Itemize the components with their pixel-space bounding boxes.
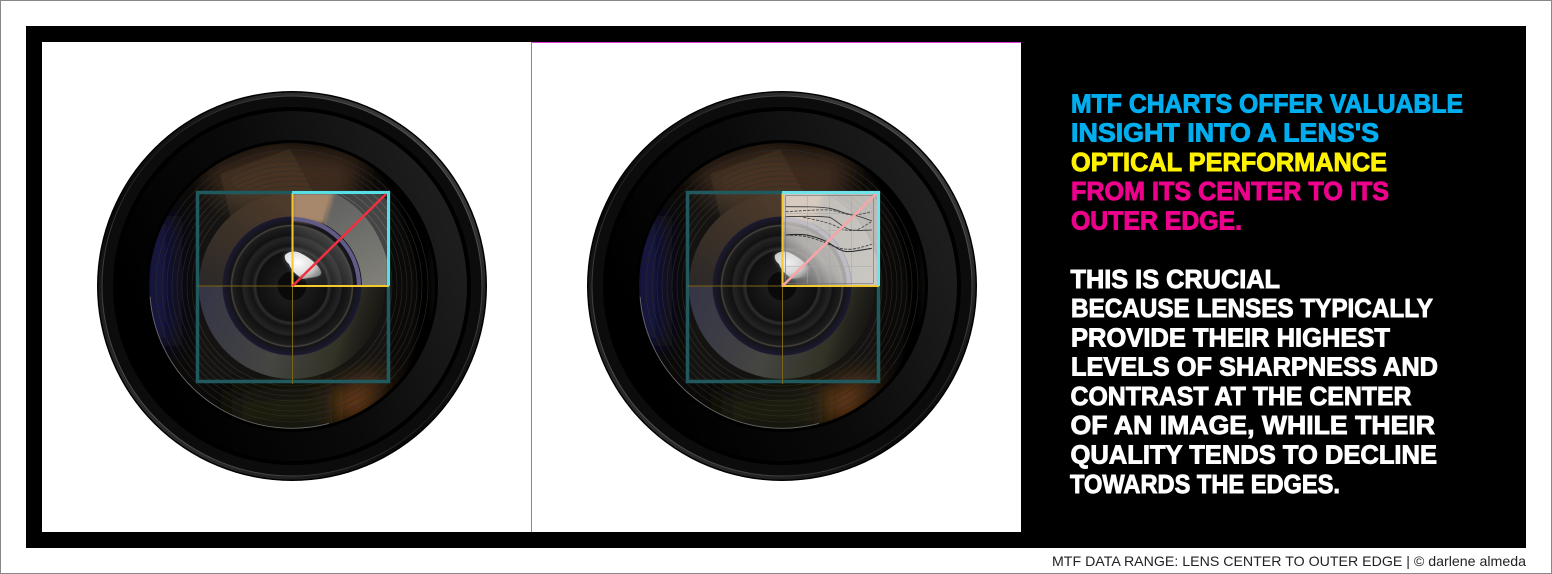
text block: explanation: BECAUSE LENSES TYPICALLY [1071, 295, 1433, 323]
heading: colored statement: MTF CHARTS OFFER VALUABLE [1071, 90, 1463, 118]
icon: camera lens right [587, 91, 977, 481]
arrow: pink diagonal right [782, 194, 876, 286]
quadrant square overlay left [197, 192, 389, 384]
text block: explanation [1070, 266, 1438, 499]
text block: explanation: TOWARDS THE EDGES. [1070, 471, 1340, 499]
heading: colored statement: FROM ITS CENTER TO ITS [1071, 178, 1389, 206]
caption: MTF DATA RANGE: LENS CENTER TO OUTER EDGE | © darlene almeda [1052, 553, 1526, 569]
icon: camera lens left [97, 91, 487, 481]
heading: colored statement: OUTER EDGE. [1071, 207, 1242, 235]
panel: right lens [531, 42, 1021, 532]
heading: colored statement [1071, 90, 1463, 235]
text block: explanation: QUALITY TENDS TO DECLINE [1070, 442, 1437, 470]
heading: colored statement: INSIGHT INTO A LENS'S [1071, 120, 1379, 148]
heading: colored statement: OPTICAL PERFORMANCE [1071, 149, 1387, 177]
arrow: red diagonal left [292, 194, 386, 286]
quadrant square overlay right [687, 192, 879, 384]
text block: explanation: CONTRAST AT THE CENTER [1070, 383, 1412, 411]
text block: explanation: PROVIDE THEIR HIGHEST [1071, 324, 1390, 352]
text block: explanation: LEVELS OF SHARPNESS AND [1071, 354, 1438, 382]
text block: explanation: OF AN IMAGE, WHILE THEIR [1070, 412, 1435, 440]
text block: explanation: THIS IS CRUCIAL [1070, 266, 1280, 294]
panel: left lens [42, 42, 531, 532]
chart: MTF curves [775, 193, 878, 286]
